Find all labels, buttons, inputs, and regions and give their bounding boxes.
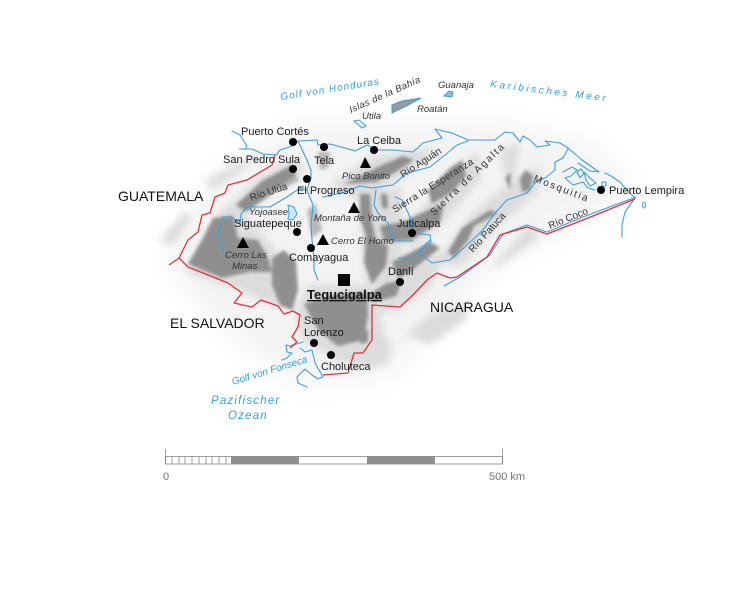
city labels: San: [304, 315, 324, 327]
city labels: La Ceiba: [357, 135, 402, 147]
city labels: San Pedro Sula: [223, 154, 301, 166]
geographic labels: Mosquitia: [532, 174, 591, 205]
geographic labels: Río Aguán: [399, 146, 444, 181]
city labels: Comayagua: [289, 252, 349, 264]
city labels: El Progreso: [297, 185, 354, 197]
sea labels: Pazifischer: [211, 395, 280, 407]
city labels: Puerto Lempira: [609, 185, 685, 197]
city labels: Danlí: [388, 266, 414, 278]
geographic labels: Río Patuca: [467, 211, 509, 255]
city labels: Choluteca: [321, 361, 371, 373]
country labels: NICARAGUA: [430, 299, 514, 315]
sea labels: Golf von Fonseca: [231, 354, 309, 388]
island: Guanaja: [444, 91, 453, 97]
sea labels: Karibisches Meer: [490, 79, 609, 104]
geographic labels: Sierra de Agalta: [428, 141, 508, 218]
city labels: Lorenzo: [304, 327, 344, 339]
capital marker: [338, 274, 350, 286]
city labels: Puerto Cortés: [241, 126, 309, 138]
geographic labels: Roatán: [417, 104, 448, 115]
scale bar: [163, 449, 525, 483]
country labels: GUATEMALA: [118, 188, 204, 204]
geographic labels: Minas: [232, 261, 258, 272]
city markers: [289, 138, 605, 359]
geographic labels: Pico Bonito: [342, 171, 390, 182]
geographic labels: Cerro Las: [225, 250, 267, 261]
city labels: Juticalpa: [397, 218, 441, 230]
capital label: Tegucigalpa: [307, 287, 383, 302]
relief shading: [160, 125, 635, 385]
sea labels: Ozean: [228, 410, 268, 422]
sea labels: Golf von Honduras: [280, 76, 381, 103]
island: Utila: [354, 120, 366, 128]
geographic labels: [225, 74, 591, 272]
geographic labels: Río Ulúa: [249, 181, 289, 204]
mountain peak markers: [237, 157, 371, 248]
national borders: [169, 155, 635, 375]
city labels: Siguatepeque: [234, 218, 302, 230]
scale bar: 0: [163, 471, 169, 483]
country labels: [118, 188, 514, 331]
geographic labels: Yojoasee: [249, 207, 288, 218]
lake near Puerto Lempira: [642, 202, 646, 208]
lake Yojoasee: [288, 205, 297, 220]
geographic labels: Montaña de Yoro: [314, 213, 386, 224]
geographic labels: Río Coco: [547, 206, 590, 232]
geographic labels: Sierra la Esperanza: [391, 157, 476, 216]
sea labels: [211, 76, 609, 422]
rivers and coastline: [218, 129, 636, 387]
country labels: EL SALVADOR: [170, 315, 265, 331]
geographic labels: Cerro El Homo: [331, 236, 394, 247]
island: Roatan: [392, 98, 421, 113]
geographic labels: Guanaja: [438, 80, 474, 91]
city labels: Tela: [314, 155, 335, 167]
geographic labels: Utila: [362, 111, 381, 122]
scale bar: 500 km: [489, 471, 525, 483]
city labels: [223, 126, 685, 373]
geographic labels: Islas de la Bahía: [348, 74, 423, 116]
